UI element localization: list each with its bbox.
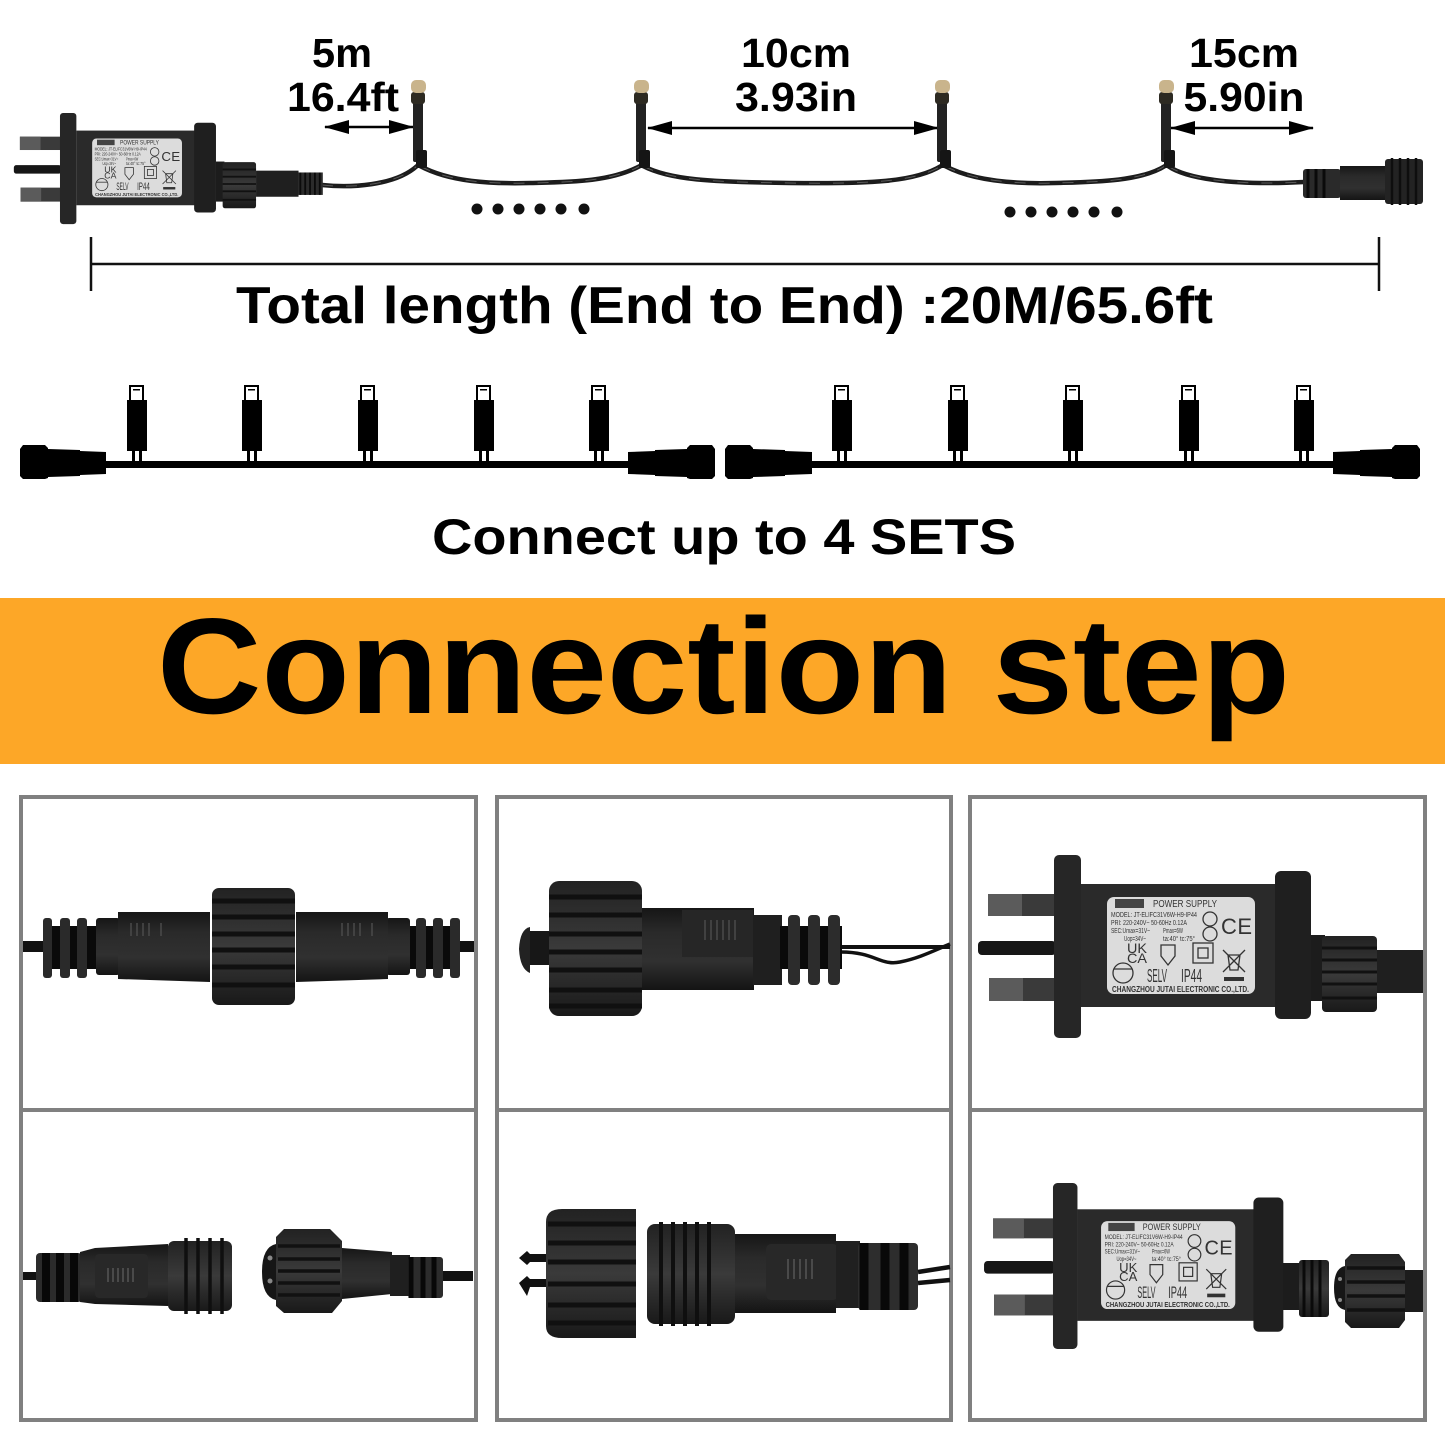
product label: MODEL: JT-ELIFC31V6W-H9-IP44 [1105, 1234, 1183, 1241]
measurements: 10cm 3.93in: 10cm [741, 30, 851, 76]
product label: CE [161, 149, 180, 164]
product label: Uop=34V~ [1124, 936, 1146, 943]
measurements: 10cm 3.93in: 3.93in [735, 74, 857, 120]
product label: IP44 [1181, 966, 1202, 986]
panel 4: separated connectors [23, 1229, 473, 1314]
product label: CHANGZHOU JUTAI ELECTRONIC CO.,LTD. [1112, 985, 1249, 994]
product label: UK [1119, 1261, 1138, 1275]
panel: step frames [21, 797, 1425, 1420]
product label [1101, 1221, 1235, 1309]
measurements: 5m 16.4ft [287, 30, 413, 127]
product label: Uop=34V~ [102, 161, 116, 166]
product label: CA [104, 171, 117, 181]
dots left [472, 204, 590, 214]
product label: CA [1127, 950, 1148, 966]
product label: CHANGZHOU JUTAI ELECTRONIC CO.,LTD. [1106, 1300, 1230, 1309]
connect up to 4 sets text: Connect up to 4 SETS [432, 509, 1016, 565]
end connector [1303, 158, 1423, 205]
product label: SEC:Umax=31V~ [1111, 928, 1150, 935]
measurements: 5m 16.4ft: 5m [312, 30, 372, 76]
schematic: two connected sets [20, 385, 1420, 479]
product label: POWER SUPPLY [1153, 899, 1217, 910]
measurements: 15cm 5.90in [1171, 30, 1313, 128]
measurements: 15cm 5.90in: 5.90in [1184, 74, 1304, 120]
product label [1107, 897, 1255, 994]
product label: ta:40° tc:75° [1163, 935, 1195, 943]
product label: UK [1127, 940, 1148, 956]
light string cable with bulbs [322, 80, 1423, 205]
bulbs [411, 80, 1175, 168]
panel 1: mated connector [23, 888, 474, 1005]
product label: MODEL: JT-ELIFC31V6W-H9-IP44 [1111, 912, 1197, 919]
panel 3: adapter [978, 855, 1423, 1038]
total length text: Total length (End to End) :20M/65.6ft [236, 277, 1213, 335]
product label: ta:40° tc:75° [126, 161, 146, 166]
product label: Uop=34V~ [1116, 1256, 1137, 1263]
product label: CE [1204, 1238, 1233, 1260]
banner heading: Connection step [157, 590, 1290, 742]
measurements: 10cm 3.93in [648, 30, 938, 128]
measurements: 15cm 5.90in: 15cm [1189, 30, 1299, 76]
dots right [1004, 206, 1122, 218]
panel 2: connector with nut [519, 881, 950, 1016]
total length dimension line [91, 237, 1379, 291]
product label: SELV [116, 181, 129, 193]
orange banner [0, 598, 1445, 764]
product label: SEC:Umax=31V~ [1105, 1249, 1140, 1256]
product label: CE [1221, 914, 1252, 939]
product label: MODEL: JT-ELIFC31V6W-H9-IP44 [95, 147, 147, 152]
product label: POWER SUPPLY [120, 141, 159, 147]
product label: Pmax=6W [1163, 928, 1183, 935]
product label: ta:40° tc:75° [1152, 1255, 1181, 1263]
product label: Pmax=6W [126, 156, 138, 161]
product label: PRI: 220-240V~ 50-60Hz 0.12A [95, 151, 141, 156]
product label: SEC:Umax=31V~ [95, 156, 119, 161]
product label: CHANGZHOU JUTAI ELECTRONIC CO.,LTD. [95, 192, 179, 198]
product label: Pmax=6W [1152, 1249, 1170, 1256]
connectors [20, 445, 1420, 479]
product label: IP44 [1168, 1284, 1187, 1302]
product label: POWER SUPPLY [1143, 1222, 1201, 1232]
panel 5: separated nut and plug [519, 1209, 950, 1338]
product label: PRI: 220-240V~ 50-60Hz 0.12A [1111, 920, 1187, 927]
power adapter (top string) [14, 113, 323, 224]
bulbs [127, 385, 1314, 461]
panel 6: adapter and separated nut [984, 1183, 1423, 1349]
product label: IP44 [137, 181, 150, 193]
product label: UK [104, 164, 117, 174]
product label: PRI: 220-240V~ 50-60Hz 0.12A [1105, 1241, 1174, 1248]
measurements: 5m 16.4ft: 16.4ft [287, 74, 399, 120]
product label: SELV [1147, 966, 1167, 986]
product label: SELV [1137, 1284, 1156, 1302]
product label: CA [1119, 1270, 1138, 1284]
product label [92, 138, 182, 198]
